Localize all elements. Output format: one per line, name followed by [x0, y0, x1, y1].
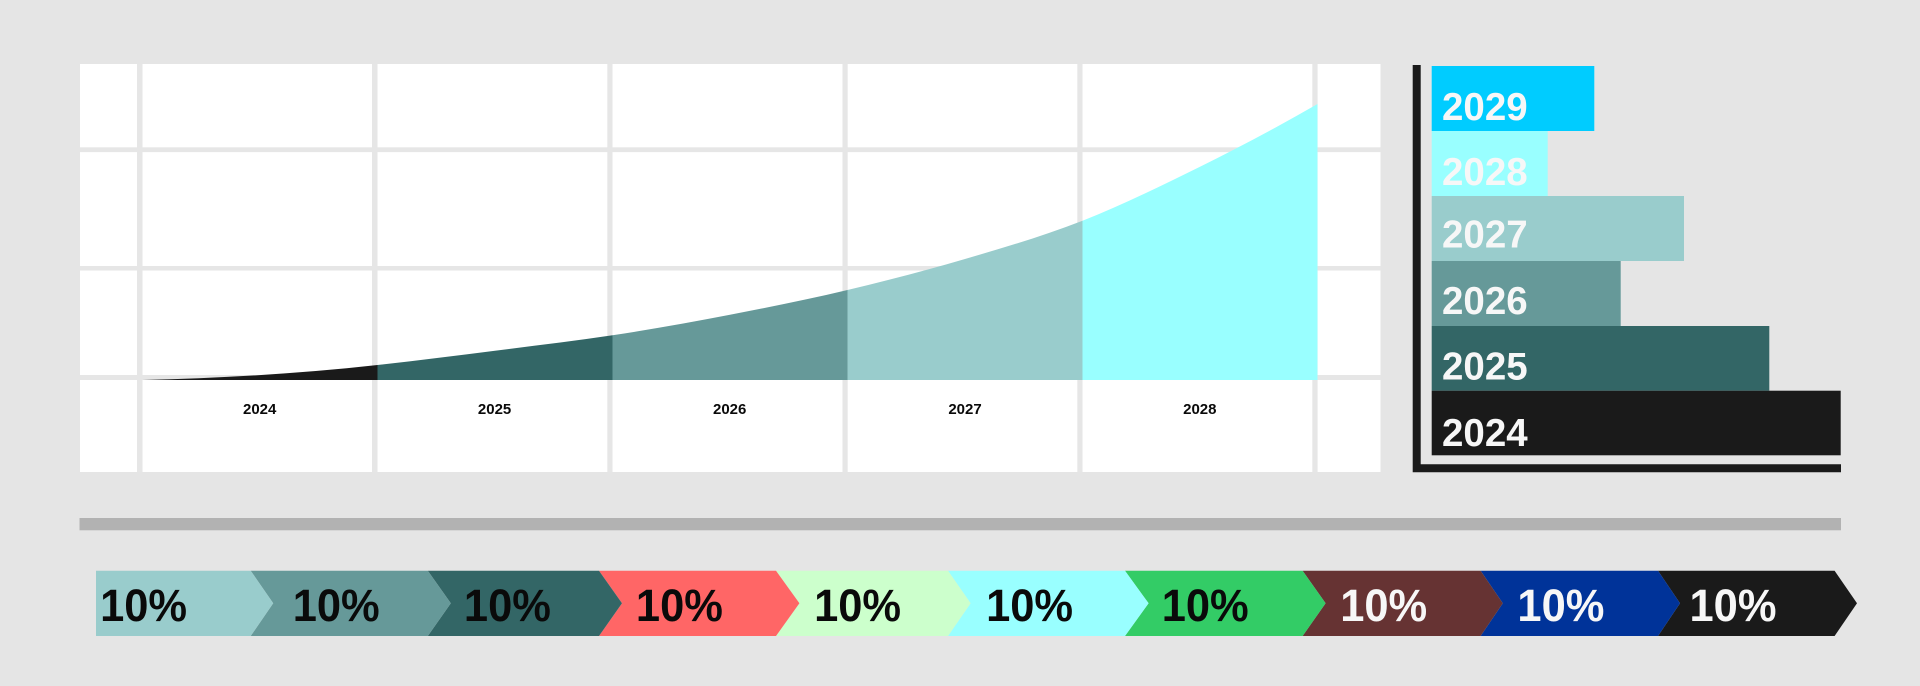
x-axis year labels: 2027: [948, 401, 982, 418]
arrow 2: 10%: [293, 580, 380, 631]
arrow 5: 10%: [814, 580, 901, 631]
arrow 5: [776, 571, 971, 636]
arrow 4: [599, 571, 799, 636]
arrow 1: [96, 571, 273, 636]
bar: 2027: 2027: [1442, 214, 1528, 256]
bar: 2026: [1432, 261, 1621, 326]
arrow 1: 10%: [100, 580, 187, 631]
bar: 2028: 2028: [1442, 151, 1528, 194]
area segment: 2027: [848, 221, 1082, 380]
arrow 3: [428, 571, 622, 636]
arrow 9: [1481, 571, 1680, 636]
bar: 2029: [1432, 66, 1594, 131]
arrow 6: [948, 571, 1149, 636]
x-axis year labels: 2028: [1183, 401, 1216, 418]
bar: 2025: [1432, 326, 1769, 391]
area segment: 2025: [378, 335, 612, 380]
arrow 8: 10%: [1340, 580, 1427, 631]
bar: 2029: 2029: [1442, 86, 1528, 129]
chart background panel: [80, 64, 1380, 472]
arrow 8: [1303, 571, 1503, 636]
bar: 2026: 2026: [1442, 280, 1528, 323]
divider bar: [80, 518, 1841, 530]
arrow 10: [1658, 571, 1857, 636]
x-axis year labels: [243, 401, 1216, 418]
x-axis year labels: 2024: [243, 401, 277, 418]
bar: 2027: [1432, 196, 1684, 261]
chart axes: [1413, 65, 1841, 472]
arrow 7: [1125, 571, 1326, 636]
bar: 2025: 2025: [1442, 346, 1528, 388]
arrow 2: [251, 571, 451, 636]
bar: 2024: 2024: [1442, 412, 1528, 455]
arrow 4: 10%: [636, 580, 723, 631]
bar: 2028: [1432, 131, 1548, 196]
panel: percentage arrow strip: [96, 571, 1857, 636]
area segment: 2026: [612, 290, 848, 380]
arrow 6: 10%: [986, 580, 1073, 631]
arrow 3: 10%: [464, 580, 551, 631]
arrow 9: 10%: [1517, 580, 1604, 631]
arrow 10: 10%: [1690, 580, 1776, 631]
panel: horizontal bar chart: [1413, 65, 1841, 472]
bar: 2024: [1432, 391, 1841, 455]
panel: area chart: [80, 64, 1380, 472]
area segment: 2028: [1082, 104, 1318, 380]
arrow 7: 10%: [1162, 580, 1249, 631]
x-axis year labels: 2026: [713, 401, 746, 418]
x-axis year labels: 2025: [478, 401, 511, 418]
area segment: 2024: [142, 365, 378, 380]
